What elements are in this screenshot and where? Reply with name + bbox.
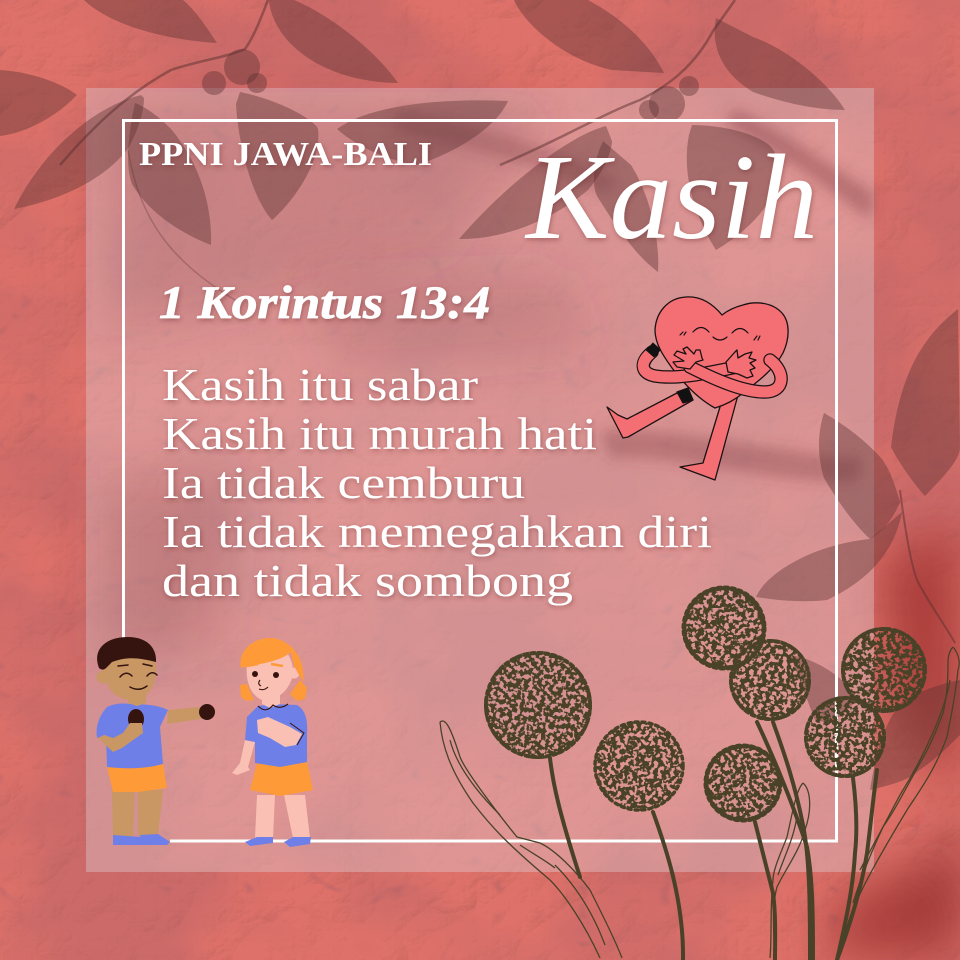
decorative leaves top left — [0, 0, 508, 300]
white frame — [124, 120, 836, 841]
decorative leaves top right — [459, 0, 845, 272]
panel creases: folded paper shadows — [100, 108, 876, 660]
illustration: allium flowers — [440, 586, 959, 960]
flower head outlines — [486, 588, 925, 820]
heading: verse reference: 1 Korintus 13:4 — [159, 277, 490, 329]
verse text block: dan tidak sombong — [162, 555, 573, 606]
illustration: girl with orange hair — [232, 638, 313, 847]
heading: organisation name: PPNI JAWA-BALI — [139, 136, 432, 173]
flower leaves — [440, 647, 959, 958]
heading: Kasih: Kasih — [524, 130, 818, 265]
illustration: boy offering a cookie — [96, 637, 215, 845]
verse text block: Ia tidak memegahkan diri — [162, 506, 712, 557]
panel: translucent square — [86, 88, 874, 872]
flower heads — [484, 586, 927, 822]
verse text block: Kasih itu sabar — [162, 359, 478, 410]
icon: hugging heart character — [607, 297, 788, 480]
verse text block — [162, 359, 712, 606]
flower stems — [550, 722, 877, 960]
verse text block: Kasih itu murah hati — [162, 408, 597, 459]
verse text block: Ia tidak cemburu — [162, 457, 525, 508]
decorative leaves right side — [756, 309, 960, 790]
